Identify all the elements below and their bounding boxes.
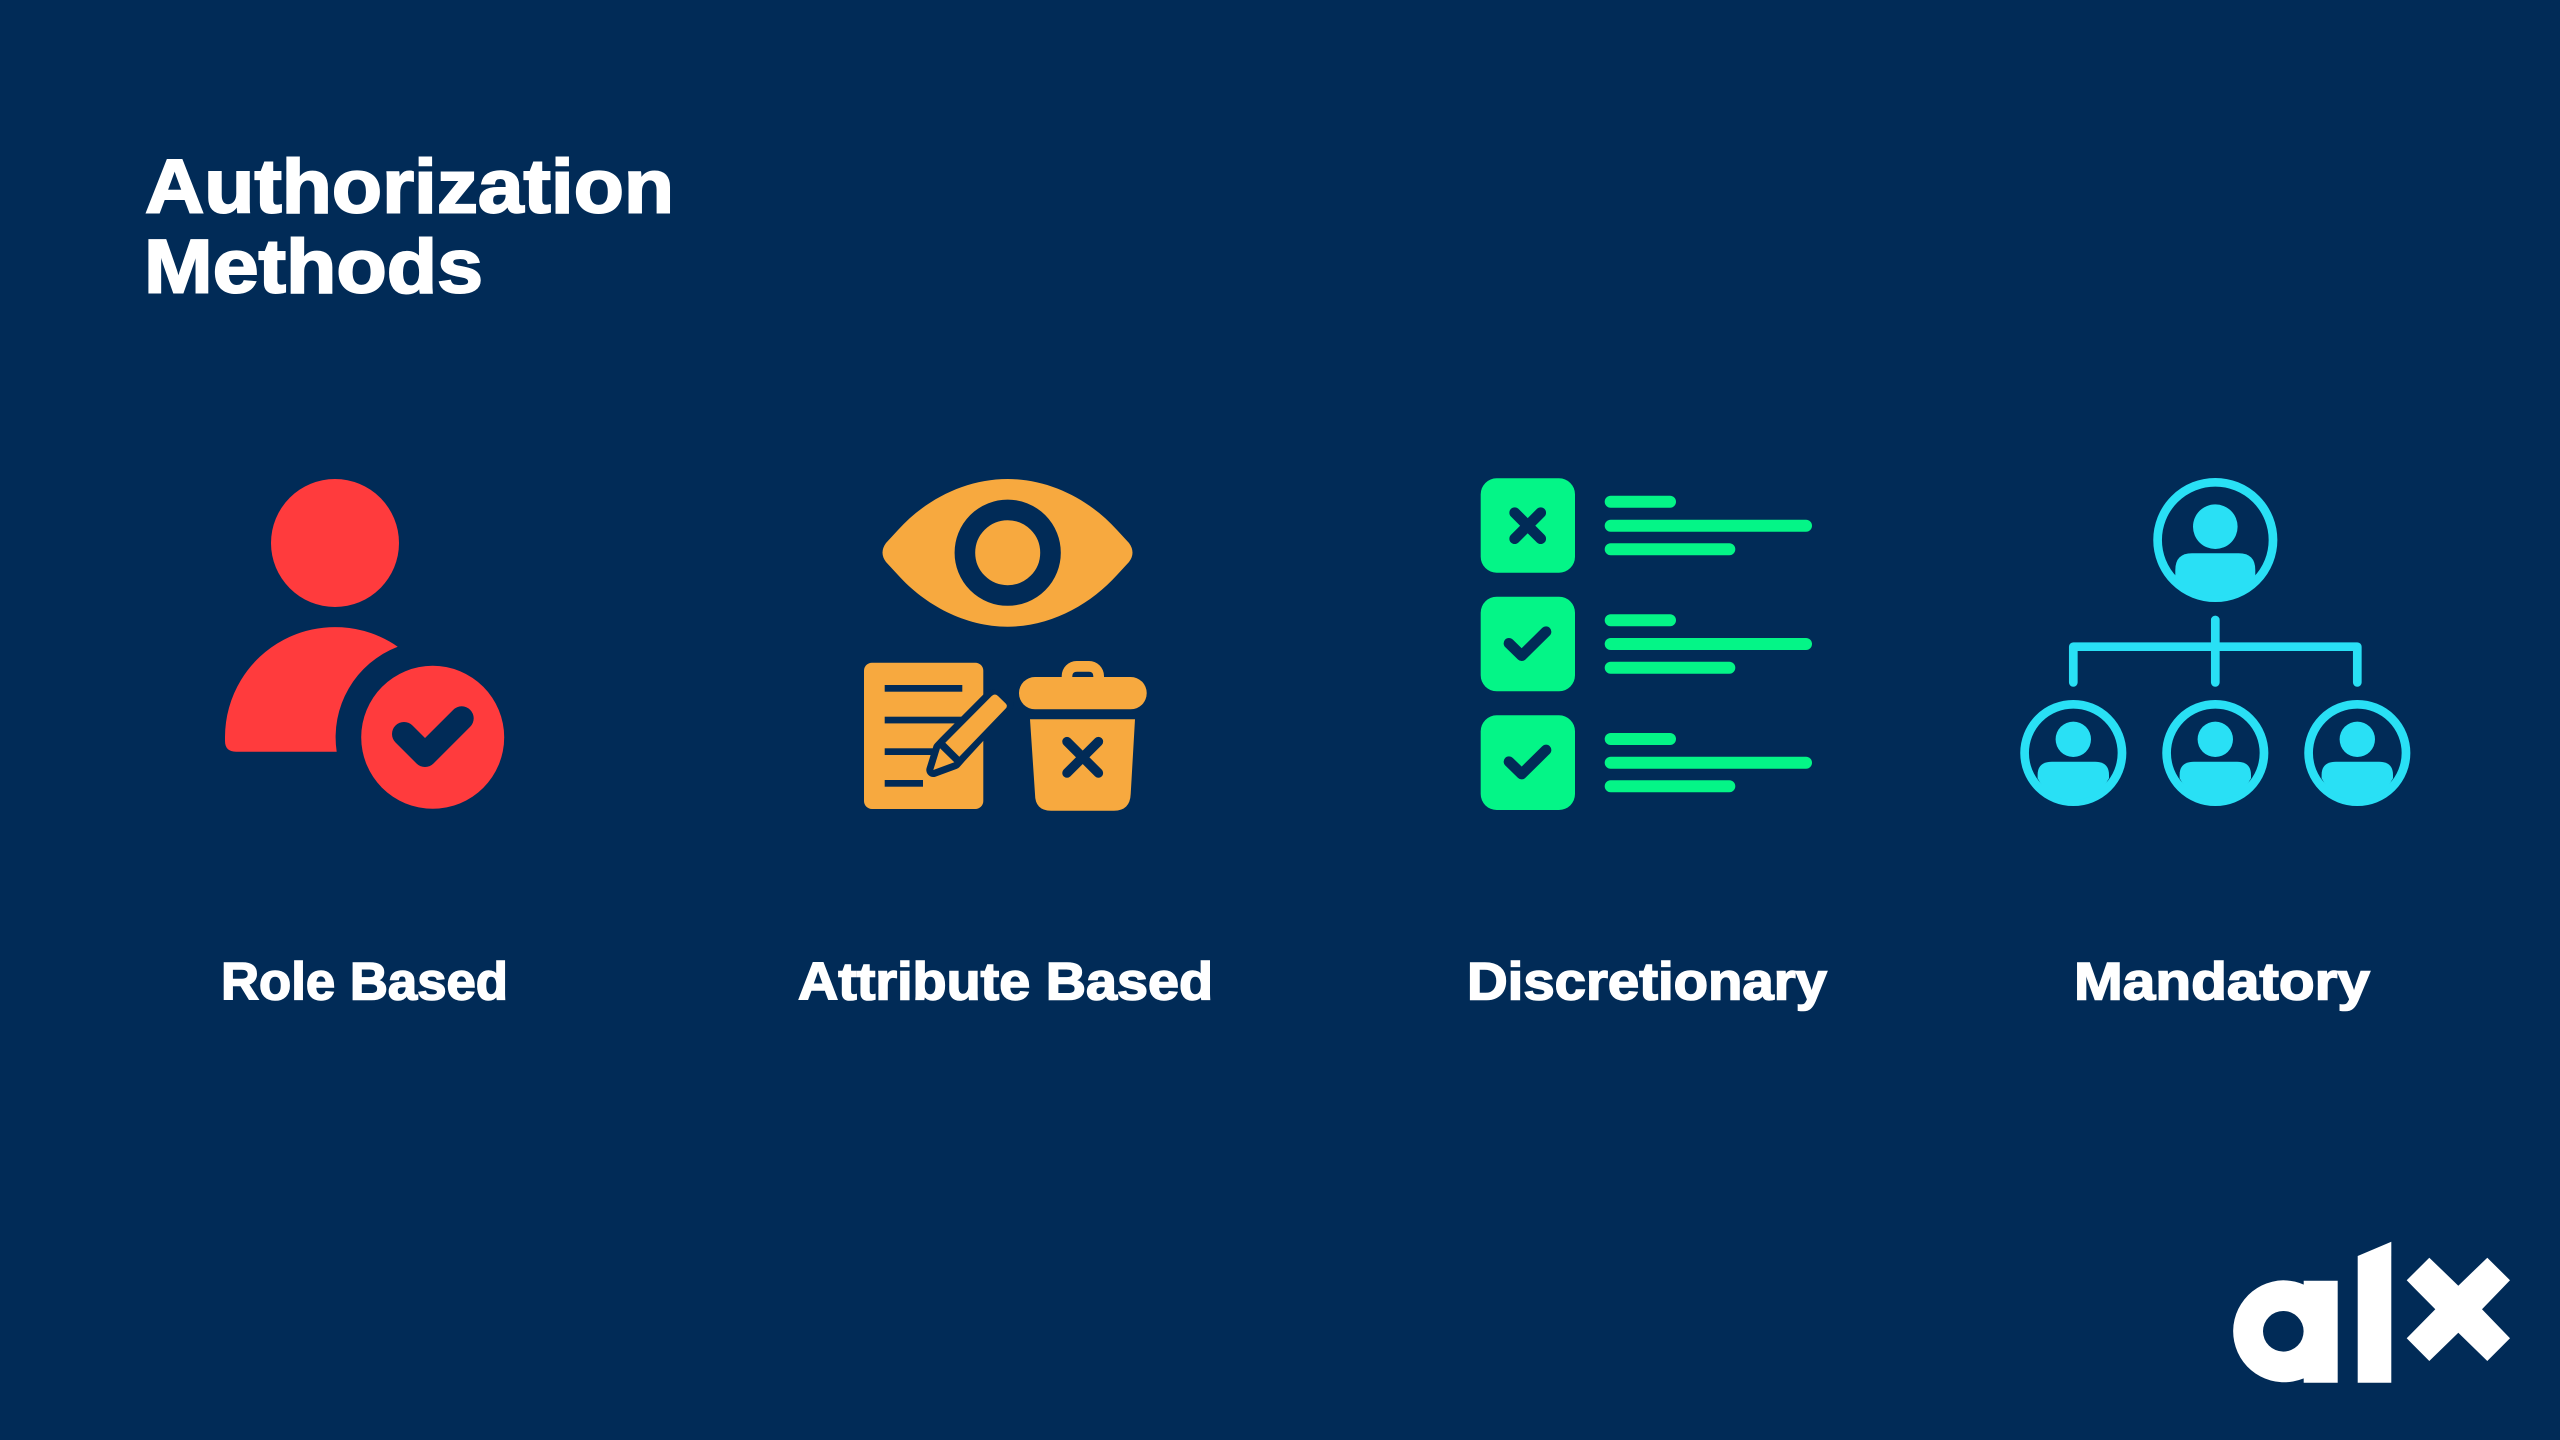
logo: alx <box>2233 1242 2510 1383</box>
label: Attribute Based: Attribute Based <box>798 952 1213 1011</box>
icon: discretionary checklist <box>1481 478 1812 810</box>
label: Mandatory: Mandatory <box>2074 952 2371 1011</box>
title <box>144 145 674 310</box>
title: Authorization <box>145 145 674 230</box>
title: Methods <box>144 225 483 310</box>
label: Discretionary: Discretionary <box>1467 952 1828 1011</box>
label: Role Based: Role Based <box>221 952 508 1011</box>
icon: attribute based eye, document and trash <box>864 479 1147 811</box>
icon: mandatory hierarchy <box>2025 482 2406 802</box>
icon: role based user with check badge <box>225 479 504 809</box>
